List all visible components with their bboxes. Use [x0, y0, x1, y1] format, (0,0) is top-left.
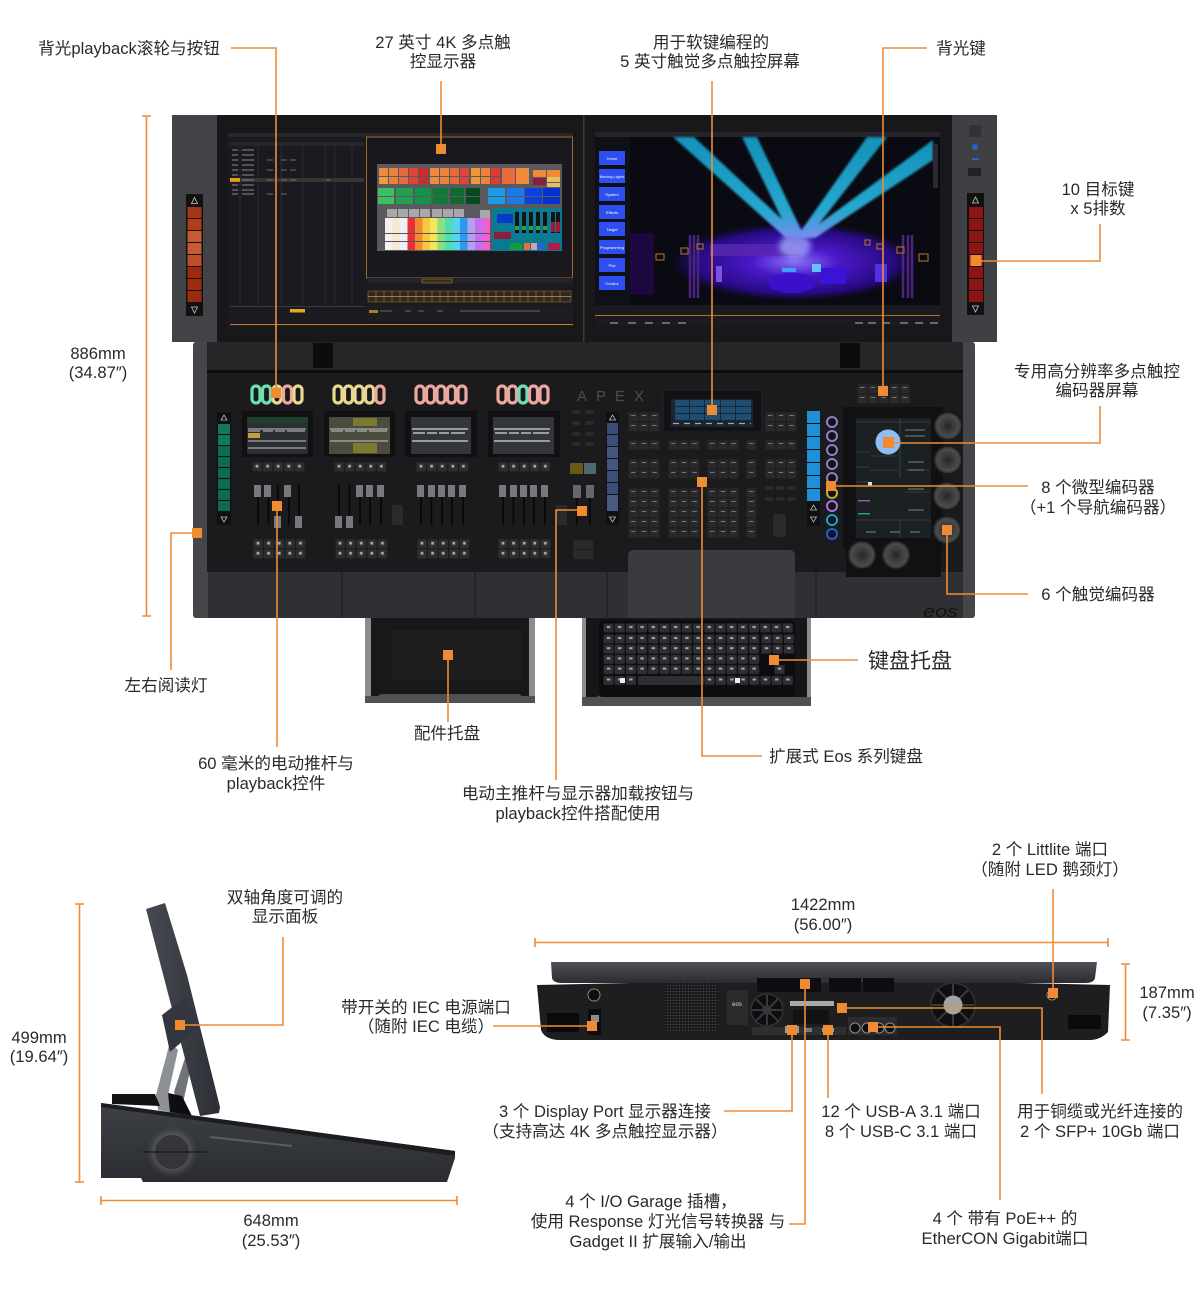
dimension: console width: (56.00″) [794, 915, 852, 934]
dimension: console height [69, 116, 151, 616]
micro encoders [827, 417, 837, 539]
callout: littlite ports: 2 个 Littlite 端口 [992, 840, 1108, 859]
callout: USB ports [821, 1025, 981, 1141]
callout: motorized master fader: 电动主推杆与显示器加载按钮与 [462, 784, 694, 803]
callout: 27 inch display: 控显示器 [410, 52, 477, 71]
callout: expanded keypad: 扩展式 Eos 系列键盘 [769, 747, 923, 766]
callout: etherCON [868, 1022, 1088, 1248]
dimension: console width: 1422mm [791, 895, 855, 914]
dimension: console width [535, 895, 1108, 947]
rear lid [551, 962, 1097, 983]
callout: 60mm faders: 60 毫米的电动推杆与 [198, 754, 354, 773]
front view: console illustration [172, 115, 997, 706]
rear view illustration [537, 962, 1110, 1040]
dimension: rear height [1121, 964, 1195, 1040]
direct select menu: Control [606, 281, 619, 286]
dimension: side height: 499mm [11, 1028, 67, 1047]
green playback column [217, 412, 231, 525]
callout: I/O garage [531, 979, 810, 1251]
callout: target keys: x 5排数 [1070, 199, 1126, 218]
callout: IEC power: （随附 IEC 电缆） [358, 1017, 494, 1036]
side view illustration [101, 903, 455, 1182]
callout: I/O garage: Gadget II 扩展输入/输出 [569, 1232, 747, 1251]
dimension: side height [10, 904, 84, 1182]
power connector [588, 989, 600, 1001]
callout: reading lights [125, 528, 207, 695]
stand legs [112, 1042, 192, 1116]
label plate [727, 990, 748, 1025]
softkey bar [595, 144, 940, 326]
bottom keys [253, 539, 306, 559]
callout: 60mm faders: playback控件 [227, 774, 325, 793]
scene: light beams [673, 137, 933, 238]
keyboard tray [582, 618, 811, 706]
callout: expanded keypad [697, 477, 923, 766]
slate playback column [606, 412, 619, 525]
callout: dual axis display panel [175, 888, 343, 1030]
callout: keyboard tray: 键盘托盘 [868, 650, 952, 673]
keyboard [599, 620, 795, 697]
right touchscreen [595, 132, 940, 326]
channel screen [242, 411, 313, 457]
dimension: side depth: 648mm [243, 1211, 299, 1230]
callout: encoder screen [883, 362, 1180, 448]
callout: reading lights: 左右阅读灯 [125, 676, 207, 695]
callout: accessory tray [414, 650, 480, 743]
dimension: console height: 886mm [70, 344, 126, 363]
callout: encoder screen: 编码器屏幕 [1056, 381, 1139, 400]
callout: keyboard tray [769, 650, 952, 673]
callout: backlit playback wheels and buttons: 背光playback滚轮与按钮 [38, 39, 220, 58]
callout: USB ports: 8 个 USB-C 3.1 端口 [825, 1122, 977, 1141]
softkey centre screen [663, 390, 762, 432]
backlit wheels [252, 386, 302, 403]
callout: littlite ports: （随附 LED 鹅颈灯） [971, 860, 1129, 879]
display arm [146, 903, 220, 1116]
direct select menu: Home [607, 156, 618, 161]
direct select menu: Target [606, 227, 618, 232]
accessory tray [365, 618, 535, 703]
callout: 5 inch softkey screen: 用于软键编程的 [653, 33, 769, 52]
callout: display port: 3 个 Display Port 显示器连接 [499, 1102, 711, 1121]
littlite ring [1047, 990, 1057, 1000]
rear body: eos [732, 1002, 742, 1008]
encoder keys [252, 462, 305, 472]
base [101, 1103, 455, 1182]
hinge [162, 996, 198, 1052]
dimension: side depth: (25.53″) [242, 1231, 300, 1250]
sub panel [366, 137, 572, 278]
callout: encoder screen: 专用高分辨率多点触控 [1014, 362, 1180, 381]
callout: motorized master fader: playback控件搭配使用 [495, 804, 661, 823]
scene: stage [630, 222, 928, 302]
direct select menu: System [605, 192, 619, 197]
port panels [790, 1001, 834, 1006]
callout: IEC power [341, 998, 597, 1036]
callout: I/O garage: 使用 Response 灯光信号转换器 与 [531, 1212, 785, 1231]
callout: backlit keys: 背光键 [936, 39, 986, 58]
callout: target keys [970, 180, 1134, 266]
callout: micro encoders [826, 478, 1176, 517]
timeline strip [367, 278, 573, 321]
playback group 3 [405, 386, 477, 559]
playback group 1 [242, 386, 313, 559]
callout: 5 inch softkey screen [620, 33, 800, 415]
callout: dual axis display panel: 显示面板 [252, 907, 319, 926]
callout: SFP ports: 2 个 SFP+ 10Gb 端口 [1020, 1122, 1180, 1141]
left target keys [186, 194, 203, 316]
direct select menu: Programming [600, 245, 624, 250]
direct select menu: Effects [606, 210, 618, 215]
playback group 4 [488, 386, 560, 559]
magic sheet buttons [377, 164, 562, 251]
backlit keys [857, 384, 911, 404]
cue list table [230, 142, 573, 325]
left touchscreen [228, 133, 573, 327]
callout: 27 inch display [375, 33, 511, 154]
callout: display port: （支持高达 4K 多点触控显示器） [482, 1122, 728, 1141]
console body [193, 342, 975, 618]
dimension: side height: (19.64″) [10, 1047, 68, 1066]
callout: backlit keys [878, 39, 986, 396]
callout: accessory tray: 配件托盘 [414, 724, 480, 743]
callout: 60mm faders [198, 501, 354, 793]
callout: dual axis display panel: 双轴角度可调的 [227, 888, 343, 907]
encoder touchscreen module [843, 407, 943, 577]
dimension: console height: (34.87″) [69, 363, 127, 382]
haptic encoders [848, 412, 962, 569]
rear body [537, 978, 1110, 1040]
palm pad [628, 550, 795, 618]
dimension: rear height: 187mm [1139, 983, 1195, 1002]
faders [254, 485, 302, 528]
pivot disc [151, 1131, 193, 1173]
callout: motorized master fader [462, 506, 694, 823]
dimension: rear height: (7.35″) [1142, 1003, 1192, 1022]
vents and fans [665, 982, 718, 1032]
callout: 5 inch softkey screen: 5 英寸触觉多点触控屏幕 [620, 52, 800, 71]
callout: SFP ports [837, 1003, 1183, 1141]
callout: USB ports: 12 个 USB-A 3.1 端口 [821, 1102, 981, 1121]
callout: I/O garage: 4 个 I/O Garage 插槽， [565, 1192, 737, 1211]
right target keys [967, 193, 984, 315]
callout: etherCON: 4 个 带有 PoE++ 的 [933, 1209, 1077, 1228]
master fader section [556, 410, 596, 559]
playback group 2 [324, 386, 403, 559]
callout: target keys: 10 目标键 [1062, 180, 1134, 199]
eos logo: eos [923, 602, 959, 621]
callout: IEC power: 带开关的 IEC 电源端口 [341, 998, 511, 1017]
callout: haptic encoders: 6 个触觉编码器 [1041, 585, 1155, 604]
main keypad [628, 412, 797, 538]
callout: SFP ports: 用于铜缆或光纤连接的 [1017, 1102, 1183, 1121]
direct select menu [599, 151, 625, 290]
direct select menu: Moving Lights [600, 174, 624, 179]
callout: micro encoders: （+1 个导航编码器） [1020, 498, 1176, 517]
callout: haptic encoders [942, 525, 1155, 604]
callout: micro encoders: 8 个微型编码器 [1041, 478, 1155, 497]
callout: backlit playback wheels and buttons [38, 39, 281, 398]
callout: littlite ports [971, 840, 1129, 998]
APEX logo: APEX [577, 388, 653, 405]
right hand ports [968, 125, 981, 176]
dimension: side depth [101, 1196, 457, 1250]
callout: etherCON: EtherCON Gigabit端口 [922, 1229, 1088, 1248]
display panel [172, 115, 997, 342]
callout: 27 inch display: 27 英寸 4K 多点触 [375, 33, 511, 52]
direct select menu: Plot [609, 263, 616, 268]
callout: display port [482, 1025, 797, 1141]
blue softkey column [807, 411, 820, 526]
